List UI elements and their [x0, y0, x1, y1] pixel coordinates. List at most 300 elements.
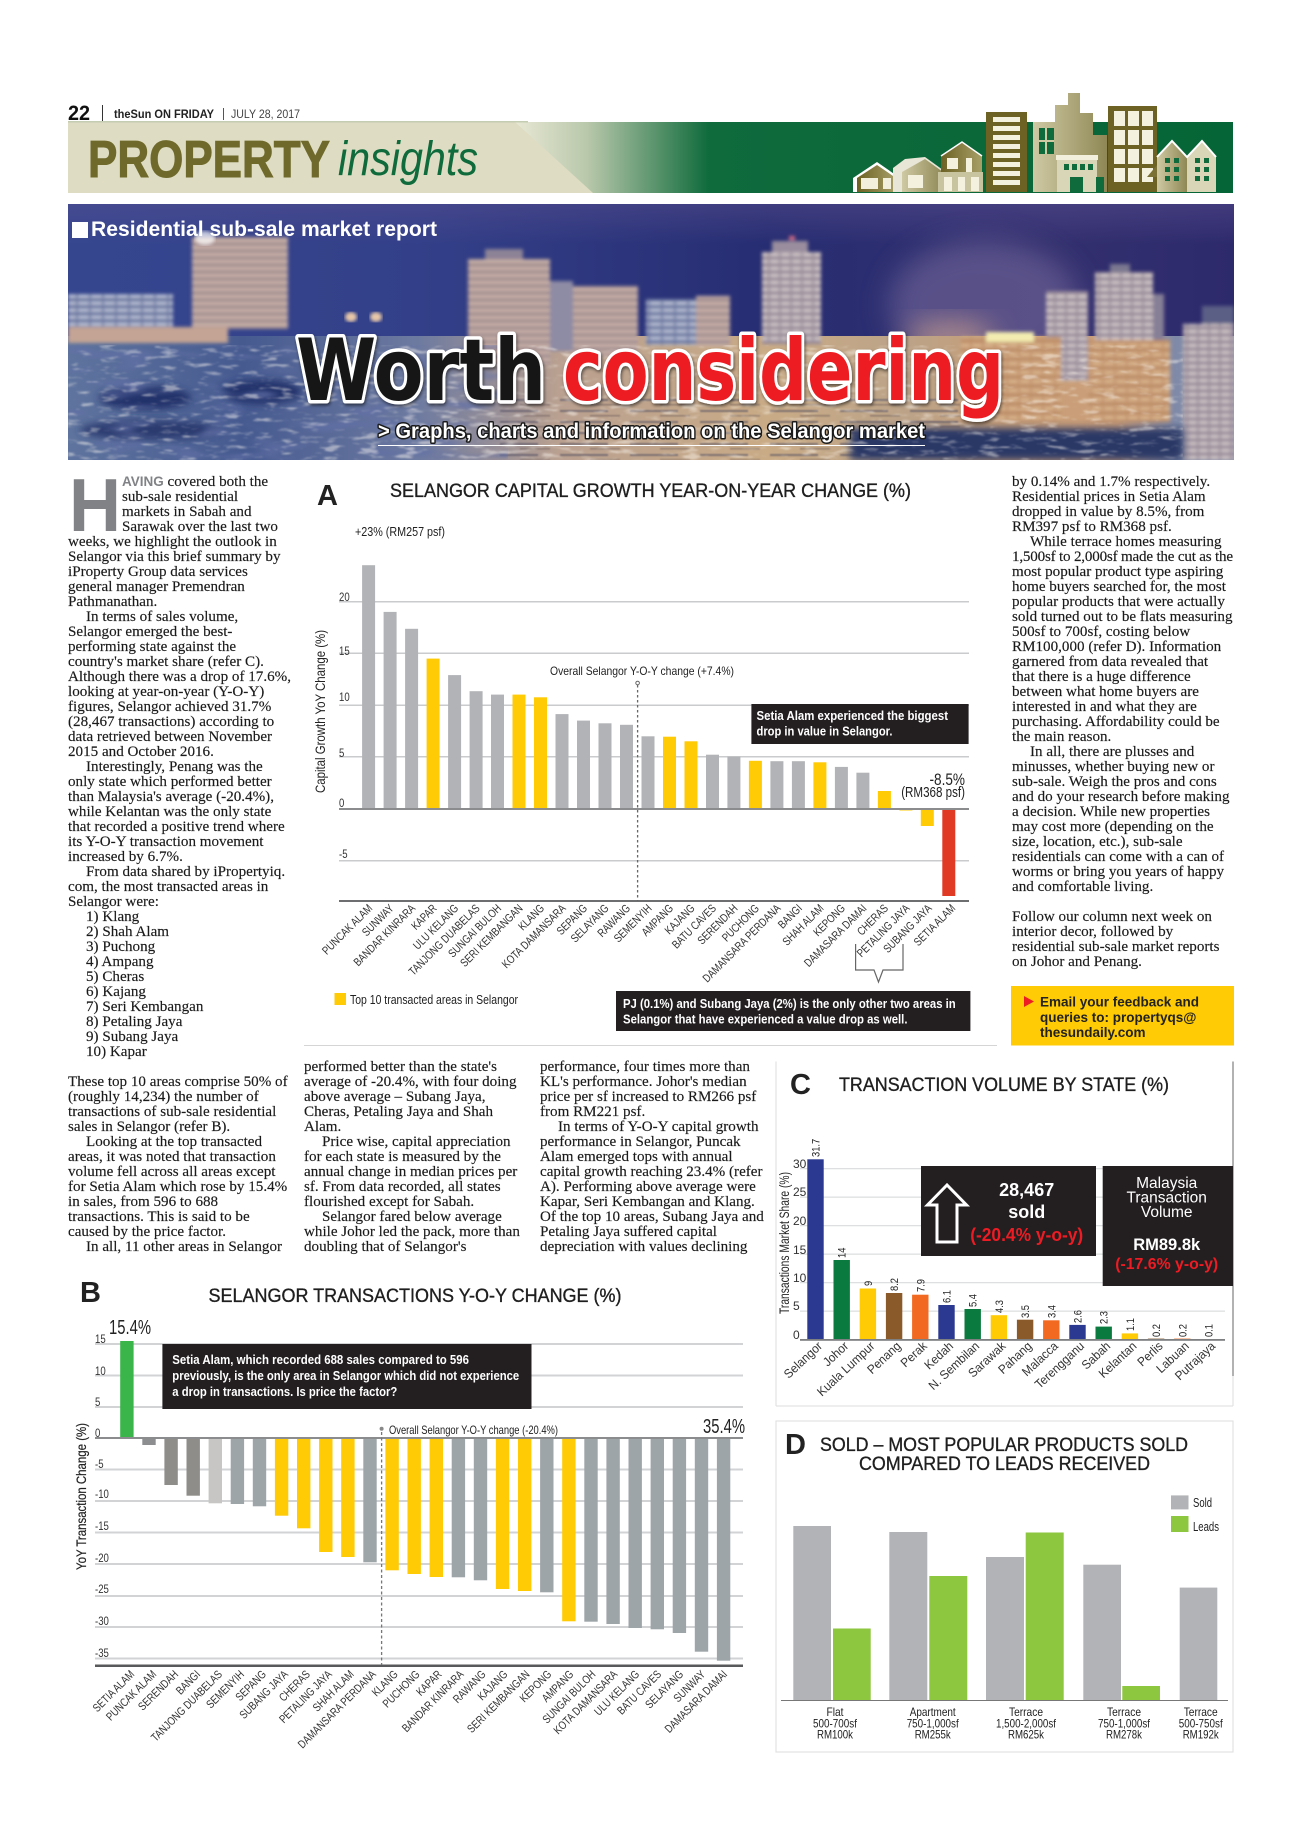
y axis title: Capital Growth YoY Change (%)	[312, 630, 328, 793]
y axis ticks: 15	[793, 1243, 807, 1257]
date: JULY 28, 2017	[231, 109, 300, 121]
article column 4: that there is a huge difference	[1012, 669, 1191, 685]
average marker line	[636, 681, 639, 901]
x axis labels: PUNCAK ALAM	[321, 903, 375, 958]
category labels: Flat	[826, 1705, 844, 1719]
article column 2: Cheras, Petaling Jaya and Shah	[304, 1104, 494, 1120]
x axis labels: Kedah	[921, 1339, 956, 1372]
article column 1: covered both the	[164, 474, 268, 490]
bar value labels: 2.6	[1073, 1310, 1085, 1323]
x axis labels: DAMANSARA PERDANA	[296, 1669, 379, 1751]
hero kicker: residential sub-sale market report: Residential sub-sale market report	[91, 217, 437, 241]
article column 3: from RM221 psf.	[540, 1104, 645, 1120]
y axis ticks: 5	[793, 1299, 800, 1313]
category labels: RM278k	[1106, 1728, 1143, 1742]
callout: Malaysia transaction volume: Transaction	[1126, 1190, 1207, 1206]
x axis labels: SUNWAY	[360, 903, 397, 939]
y axis ticks: -10	[95, 1488, 109, 1501]
y axis ticks: -5	[339, 848, 348, 861]
y axis ticks: 10	[95, 1365, 106, 1378]
category labels: 750-1,000sf	[907, 1716, 959, 1730]
panel B: transactions chart	[73, 1277, 745, 1751]
article column 1: transactions of sub-sale residential	[68, 1104, 276, 1120]
article column 1: (roughly 14,234) the number of	[68, 1089, 260, 1105]
bar value labels: 9	[863, 1281, 875, 1286]
x axis labels: SEPANG	[234, 1669, 269, 1704]
bar value labels	[811, 1139, 1216, 1337]
x axis labels: CHERAS	[277, 1669, 313, 1704]
callout: email feedback	[1011, 986, 1234, 1046]
article column 4: minusses, whether buying new or	[1012, 759, 1214, 775]
category labels: Terrace	[1107, 1705, 1141, 1719]
bar value labels: 3.5	[1020, 1305, 1032, 1318]
x axis labels: DAMASARA DAMAI	[663, 1669, 730, 1736]
callout: units sold: (-20.4% y-o-y)	[970, 1225, 1083, 1245]
article column 1: 9) Subang Jaya	[86, 1029, 179, 1045]
callout: PJ and Subang Jaya	[616, 991, 970, 1031]
article column 1: for Setia Alam which rose by 15.4%	[68, 1179, 288, 1195]
average label: Overall Selangor Y-O-Y change (+7.4%)	[550, 664, 734, 678]
callout: email feedback: thesundaily.com	[1040, 1025, 1146, 1040]
article column 1: markets in Sabah and	[122, 504, 252, 520]
article column 4: on Johor and Penang.	[1012, 954, 1142, 970]
callout: email feedback: queries to: propertyqs@	[1040, 1010, 1196, 1025]
x axis labels: KOTA DAMANSARA	[552, 1669, 620, 1737]
bar value labels: 0.1	[1204, 1324, 1216, 1337]
bar value labels: 31.7	[811, 1139, 823, 1157]
x axis labels: BATU CAVES	[670, 903, 719, 952]
article column 3: Kapar, Seri Kembangan and Klang.	[540, 1194, 755, 1210]
x axis labels: SHAH ALAM	[311, 1669, 357, 1715]
article column 2: Price wise, capital appreciation	[322, 1134, 511, 1150]
article column 2: Selangor fared below average	[322, 1209, 502, 1225]
legend: Top 10 transacted areas in Selangor	[350, 992, 519, 1007]
x axis labels: Perlis	[1134, 1339, 1166, 1369]
y axis ticks: 0	[95, 1427, 100, 1440]
article column 4: interested in and what they are	[1012, 699, 1197, 715]
article column 1: Looking at the top transacted	[86, 1134, 262, 1150]
article column 4: between what home buyers are	[1012, 684, 1199, 700]
y axis ticks: 20	[793, 1214, 807, 1228]
article column 2: while Johor led the pack, more than	[304, 1224, 520, 1240]
article column 1: 2) Shah Alam	[86, 924, 169, 940]
x axis labels: Pahang	[995, 1339, 1035, 1377]
x axis labels: KLANG	[517, 903, 547, 933]
panel A: capital growth chart	[304, 480, 997, 1046]
article column 1: AVING	[122, 474, 164, 489]
bar value labels: 3.4	[1047, 1305, 1059, 1318]
y axis ticks: 25	[793, 1185, 807, 1199]
x axis labels: SUNGAI BULOH	[447, 903, 504, 960]
x axis labels: SUNWAY	[672, 1669, 708, 1705]
article column 2: performed better than the state's	[304, 1059, 497, 1075]
article column 1: 4) Ampang	[86, 954, 154, 970]
article column 1: increased by 6.7%.	[68, 849, 183, 865]
x axis labels: SEPANG	[555, 903, 590, 938]
article column 1: while Kelantan was the only state	[68, 804, 272, 820]
x axis labels: DAMANSARA PERDANA	[701, 903, 784, 985]
chart C title: TRANSACTION VOLUME BY STATE (%)	[839, 1075, 1169, 1096]
x axis labels: Perak	[898, 1338, 931, 1370]
callout: Malaysia transaction volume: Volume	[1141, 1204, 1193, 1221]
x axis labels: KAPAR	[410, 902, 440, 933]
article column 1: sub-sale residential	[122, 489, 238, 505]
category labels: 750-1,000sf	[1098, 1716, 1151, 1730]
article column 2: annual change in median prices per	[304, 1164, 517, 1180]
article column 1: iProperty Group data services	[68, 564, 248, 580]
article column 3: Of the top 10 areas, Subang Jaya and	[540, 1209, 764, 1225]
article column 1: In all, 11 other areas in Selangor	[86, 1239, 282, 1255]
x axis labels: N. Sembilan	[926, 1339, 982, 1393]
article column 2: for each state is measured by the	[304, 1149, 501, 1165]
article column 3: A). Performing above average were	[540, 1179, 756, 1195]
article column 1: 5) Cheras	[86, 969, 144, 985]
x axis labels: SELAYANG	[644, 1669, 686, 1711]
x axis labels	[321, 902, 958, 985]
x axis labels: Selangor	[781, 1339, 825, 1381]
callout: Setia Alam sales: a drop in transactions. Is price the factor?	[172, 1384, 397, 1399]
x axis labels: Sarawak	[965, 1338, 1009, 1380]
x axis labels: DAMASARA DAMAI	[803, 903, 870, 970]
callout: Malaysia transaction volume: RM89.8k	[1133, 1236, 1201, 1254]
category labels: 500-700sf	[813, 1716, 858, 1730]
article column 1: weeks, we highlight the outlook in	[68, 534, 277, 550]
hero subtitle: > Graphs, charts and information on the Selangor market	[378, 420, 925, 443]
y axis ticks: 5	[95, 1396, 100, 1409]
callout: biggest drop	[751, 704, 969, 744]
callout: units sold: 28,467	[999, 1180, 1054, 1200]
chart D title	[820, 1435, 1188, 1475]
x axis labels: PETALING JAYA	[278, 1669, 335, 1726]
article column 1: sales in Selangor (refer B).	[68, 1119, 230, 1135]
category labels: RM625k	[1008, 1728, 1045, 1742]
x axis labels: SELAYANG	[569, 903, 612, 945]
article column 3: KL's performance. Johor's median	[540, 1074, 747, 1090]
x axis labels: TANJONG DUABELAS	[407, 903, 483, 978]
x axis labels: Kuala Lumpur	[814, 1339, 878, 1399]
y axis ticks: -15	[95, 1520, 109, 1533]
callout: Malaysia transaction volume: (-17.6% y-o-y)	[1115, 1256, 1218, 1273]
article column 4: most popular product type aspiring	[1012, 564, 1224, 580]
top bar annotation: +23% (RM257 psf)	[355, 524, 445, 539]
panel C: transaction volume by state	[776, 1062, 1233, 1406]
x axis labels: PETALING JAYA	[855, 903, 913, 960]
article column 3: performance, four times more than	[540, 1059, 750, 1075]
x axis labels: AMPANG	[640, 903, 676, 939]
Setia Alam value annotation: -8.5%	[930, 771, 965, 789]
x axis labels: RAWANG	[451, 1669, 489, 1706]
article column 1: figures, Selangor achieved 31.7%	[68, 699, 272, 715]
x axis labels: Putrajaya	[1172, 1339, 1218, 1383]
article column 1: From data shared by iPropertyiq.	[86, 864, 285, 880]
x axis labels: SERENDAH	[696, 903, 741, 947]
y axis ticks: 5	[339, 747, 344, 760]
article column 2: Alam.	[304, 1119, 341, 1135]
chart D title: SOLD – MOST POPULAR PRODUCTS SOLD	[820, 1435, 1188, 1456]
article column 1: Selangor were:	[68, 894, 159, 910]
article column 4: residentials can come with a can of	[1012, 849, 1225, 865]
article column 1: only state which performed better	[68, 774, 272, 790]
article column 4: and comfortable living.	[1012, 879, 1153, 895]
icon: skyline of houses and towers	[853, 93, 1216, 192]
y axis ticks: 20	[339, 591, 350, 604]
bar value labels: 0.2	[1151, 1324, 1163, 1337]
x axis labels: KEPONG	[518, 1669, 555, 1705]
y axis ticks	[95, 1333, 109, 1660]
chart A title: SELANGOR CAPITAL GROWTH YEAR-ON-YEAR CHANGE (%)	[390, 481, 911, 502]
y axis ticks: -5	[95, 1458, 104, 1471]
chart B title: SELANGOR TRANSACTIONS Y-O-Y CHANGE (%)	[208, 1286, 622, 1307]
x axis labels: BANDAR KINRARA	[352, 903, 418, 969]
article column 1: performing state against the	[68, 639, 236, 655]
legend	[1171, 1495, 1219, 1534]
y axis ticks: 0	[339, 797, 344, 810]
drop cap: H	[69, 463, 121, 547]
article column 1: volume fell across all areas except	[68, 1164, 276, 1180]
x axis labels: Sabah	[1079, 1339, 1113, 1372]
article column 4: Residential prices in Setia Alam	[1012, 489, 1206, 505]
article column 1: Selangor via this brief summary by	[68, 549, 281, 565]
average label: Overall Selangor Y-O-Y change (-20.4%)	[389, 1423, 558, 1437]
x axis labels: SUNGAI BULOH	[541, 1669, 599, 1726]
article column 1: its Y-O-Y transaction movement	[68, 834, 264, 850]
x axis labels: SERI KEMBANGAN	[466, 1669, 533, 1736]
x axis labels: BANGI	[776, 903, 805, 932]
x axis labels: BATU CAVES	[616, 1669, 664, 1718]
category labels: Terrace	[1009, 1705, 1043, 1719]
x axis labels: SEMENYIH	[205, 1669, 247, 1711]
x axis labels: ULU KELANG	[412, 903, 461, 953]
x axis labels	[91, 1668, 730, 1751]
article column 4: sold turned out to be flats measuring	[1012, 609, 1233, 625]
x axis labels: SETIA ALAM	[91, 1669, 137, 1715]
article column 1: 8) Petaling Jaya	[86, 1014, 183, 1030]
article column 4: residential sub-sale market reports	[1012, 939, 1220, 955]
callout: units sold: sold	[1008, 1202, 1045, 1222]
banner title: property insights: PROPERTY	[88, 131, 330, 189]
article column 4: Follow our column next week on	[1012, 909, 1212, 925]
article column 4: garnered from data revealed that	[1012, 654, 1209, 670]
category labels: 500-750sf	[1179, 1716, 1223, 1730]
x axis labels: Penang	[864, 1339, 904, 1377]
category labels: Apartment	[910, 1705, 956, 1719]
section banner	[68, 93, 1233, 193]
y axis ticks	[339, 591, 350, 861]
x axis labels: RAWANG	[596, 903, 633, 940]
callout: units sold	[921, 1166, 1096, 1256]
y axis ticks	[793, 1157, 807, 1342]
bars	[362, 565, 955, 896]
publication name: theSun ON FRIDAY	[114, 109, 214, 121]
x axis labels: KLANG	[370, 1669, 401, 1699]
article column 1: data retrieved between November	[68, 729, 272, 745]
article column 3: performance in Selangor, Puncak	[540, 1134, 741, 1150]
article column 1: that recorded a positive trend where	[68, 819, 285, 835]
letter A: A	[317, 480, 338, 512]
article column 1: looking at year-on-year (Y-O-Y)	[68, 684, 264, 700]
x axis labels: BANGI	[174, 1669, 203, 1698]
x axis labels: SERENDAH	[137, 1669, 181, 1713]
y axis ticks: 10	[339, 691, 350, 704]
category labels: Terrace	[1184, 1705, 1218, 1719]
article column 4: by 0.14% and 1.7% respectively.	[1012, 474, 1210, 490]
chart D title: COMPARED TO LEADS RECEIVED	[859, 1454, 1150, 1475]
article column 1: (28,467 transactions) according to	[68, 714, 274, 730]
x axis labels: SERI KEMBANGAN	[459, 903, 526, 970]
legend: Sold	[1193, 1496, 1212, 1510]
page number: 22	[68, 102, 90, 125]
x axis labels: Labuan	[1153, 1339, 1192, 1376]
callout: Setia Alam sales	[162, 1344, 532, 1409]
bars	[793, 1526, 1217, 1700]
article column 1: transactions. This is said to be	[68, 1209, 250, 1225]
category labels	[813, 1705, 1223, 1742]
Setia Alam value annotation	[901, 771, 965, 800]
article column 3: Petaling Jaya suffered capital	[540, 1224, 717, 1240]
page folio	[68, 102, 300, 125]
article column 1: Interestingly, Penang was the	[86, 759, 263, 775]
article column 4: worms or bring you years of happy	[1012, 864, 1225, 880]
article column 1: caused by the price factor.	[68, 1224, 226, 1240]
y axis ticks: -35	[95, 1647, 109, 1660]
x axis labels: Malacca	[1019, 1339, 1061, 1379]
letter C: C	[790, 1069, 811, 1101]
x axis labels: KAJANG	[663, 903, 698, 937]
article column 4: dropped in value by 8.5%, from	[1012, 504, 1205, 520]
category labels: RM100k	[817, 1728, 854, 1742]
callout: PJ and Subang Jaya: Selangor that have experienced a value drop as well.	[623, 1012, 908, 1027]
y axis ticks: 30	[793, 1157, 807, 1171]
headline: worth considering: Worth	[296, 321, 546, 421]
y axis ticks: 0	[793, 1328, 800, 1342]
callout: Setia Alam sales: previously, is the only area in Selangor which did not experience	[172, 1368, 519, 1383]
article column 3: Alam emerged tops with annual	[540, 1149, 733, 1165]
x axis labels: SEMENYIH	[612, 903, 655, 945]
x axis labels: TANJONG DUABELAS	[149, 1669, 225, 1744]
article column 3: price per sf increased to RM266 psf	[540, 1089, 757, 1105]
callout: biggest drop: drop in value in Selangor.	[756, 724, 892, 738]
x axis labels: SUBANG JAYA	[238, 1669, 291, 1722]
article column 2: sf. From data recorded, all states	[304, 1179, 501, 1195]
x axis labels: ULU KELANG	[593, 1669, 642, 1719]
banner title: property insights: insights	[338, 133, 478, 186]
x axis labels: PUNCAK ALAM	[105, 1669, 159, 1724]
bars	[807, 1159, 1217, 1340]
callout: biggest drop: Setia Alam experienced the biggest	[756, 708, 949, 723]
x axis labels: SHAH ALAM	[781, 903, 827, 949]
Setia Alam value annotation: (RM368 psf)	[901, 784, 965, 800]
article column 3: depreciation with values declining	[540, 1239, 748, 1255]
article column 4: home buyers searched for, the most	[1012, 579, 1227, 595]
article column 4: In all, there are plusses and	[1030, 744, 1195, 760]
article column 4: While terrace homes measuring	[1030, 534, 1222, 550]
y axis ticks: 15	[339, 645, 350, 658]
article column 4: a decision. While new properties	[1012, 804, 1210, 820]
article column 4: size, location, etc.), sub-sale	[1012, 834, 1183, 850]
callout: email feedback: Email your feedback and	[1040, 994, 1199, 1010]
article column 4: sub-sale. Weigh the pros and cons	[1012, 774, 1217, 790]
y axis ticks: -20	[95, 1552, 109, 1565]
bar value labels: 4.3	[994, 1300, 1006, 1313]
y axis title: YoY Transaction Change (%)	[73, 1423, 89, 1570]
article column 1: 10) Kapar	[86, 1044, 147, 1060]
article column 1	[68, 463, 291, 1255]
bar value labels: 6.1	[942, 1290, 954, 1303]
article column 1: general manager Premendran	[68, 579, 245, 595]
category labels: 1,500-2,000sf	[996, 1716, 1057, 1730]
article column 4: may cost more (depending on the	[1012, 819, 1214, 835]
letter D: D	[785, 1429, 806, 1461]
article column 1: com, the most transacted areas in	[68, 879, 269, 895]
article column 1: than Malaysia's average (-20.4%),	[68, 789, 274, 805]
article column 1: Selangor emerged the best-	[68, 624, 232, 640]
article column 4: purchasing. Affordability could be	[1012, 714, 1220, 730]
article column 4: RM100,000 (refer D). Information	[1012, 639, 1222, 655]
x axis labels: PUCHONG	[720, 903, 762, 945]
y axis title: Transactions Market Share (%)	[776, 1172, 792, 1314]
category labels: RM255k	[915, 1728, 952, 1742]
article column 4: 1,500sf to 2,000sf made the cut as the	[1012, 549, 1233, 565]
bar value labels: 14	[837, 1247, 849, 1258]
headline: worth considering	[296, 321, 1004, 421]
lowest value annotation: 35.4%	[703, 1416, 745, 1438]
article column 1: Pathmanathan.	[68, 594, 157, 610]
x axis labels: BANDAR KINRARA	[400, 1669, 467, 1735]
article column 4: RM397 psf to RM368 psf.	[1012, 519, 1172, 535]
article column 4: popular products that were actually	[1012, 594, 1225, 610]
x axis labels: KAJANG	[476, 1669, 511, 1703]
callout: Setia Alam sales: Setia Alam, which recorded 688 sales compared to 596	[172, 1352, 469, 1367]
x axis labels: PUCHONG	[381, 1669, 423, 1711]
article column 3: In terms of Y-O-Y capital growth	[558, 1119, 759, 1135]
legend: Leads	[1193, 1520, 1219, 1534]
article column 3: capital growth reaching 23.4% (refer	[540, 1164, 763, 1180]
category labels: RM192k	[1183, 1728, 1220, 1742]
bar value labels: 8.2	[889, 1278, 901, 1291]
letter B: B	[80, 1277, 101, 1309]
article column 4: interior decor, followed by	[1012, 924, 1174, 940]
y axis ticks: -30	[95, 1615, 109, 1628]
article column 1: country's market share (refer C).	[68, 654, 264, 670]
article column 4: the main reason.	[1012, 729, 1111, 745]
x axis labels: SUBANG JAYA	[882, 903, 935, 956]
article column 1: 2015 and October 2016.	[68, 744, 214, 760]
y axis ticks: 10	[793, 1271, 807, 1285]
y axis ticks: 15	[95, 1333, 106, 1346]
article column 2: flourished except for Sabah.	[304, 1194, 474, 1210]
x axis labels: CHERAS	[855, 903, 891, 938]
callout: Malaysia transaction volume	[1103, 1166, 1233, 1286]
bracket pointer	[856, 944, 903, 982]
article column 1: In terms of sales volume,	[86, 609, 238, 625]
headline: worth considering: considering	[563, 321, 1004, 421]
article column 1: 6) Kajang	[86, 984, 146, 1000]
article column 2: doubling that of Selangor's	[304, 1239, 467, 1255]
x axis labels: AMPANG	[540, 1669, 577, 1705]
bar value labels: 2.3	[1099, 1311, 1111, 1324]
bar value labels: 0.2	[1178, 1324, 1190, 1337]
x axis labels: Johor	[820, 1339, 851, 1369]
article column 4: 500sf to 700sf, costing below	[1012, 624, 1190, 640]
x axis labels: SETIA ALAM	[912, 903, 958, 949]
x axis labels: KOTA DAMANSARA	[500, 903, 569, 971]
top value annotation: 15.4%	[109, 1317, 151, 1339]
icon: up arrow	[928, 1185, 966, 1242]
article column 1: These top 10 areas comprise 50% of	[68, 1074, 289, 1090]
average marker line	[380, 1427, 384, 1665]
panel D: products sold vs leads	[776, 1421, 1233, 1752]
article column 1: 3) Puchong	[86, 939, 156, 955]
